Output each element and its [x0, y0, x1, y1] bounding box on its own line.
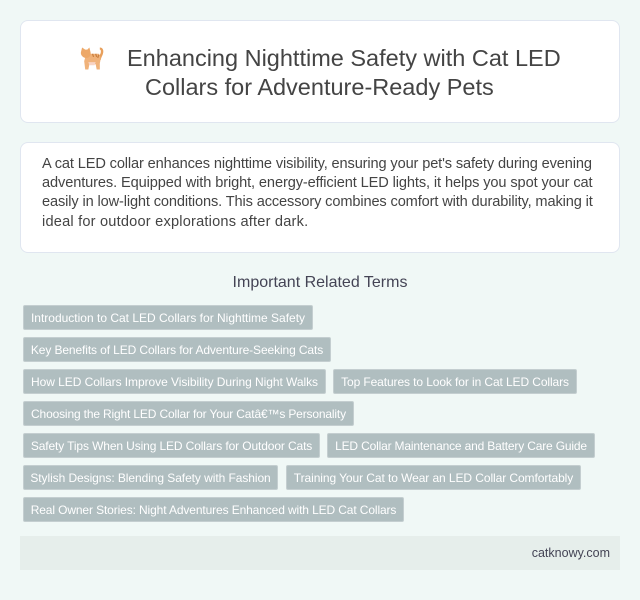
- tag: Introduction to Cat LED Collars for Nighttime Safety: [31, 311, 305, 325]
- tag: [23, 369, 326, 394]
- tag: [23, 465, 278, 490]
- title: Collars for Adventure-Ready Pets: [145, 74, 494, 100]
- description text: easily in low-light conditions. This accessory combines comfort with durability, making it: [42, 194, 593, 210]
- tag: [23, 497, 404, 522]
- description text: ideal for outdoor explorations after dark.: [42, 214, 308, 230]
- footer text: catknowy.com: [532, 546, 610, 560]
- tag: How LED Collars Improve Visibility During Night Walks: [31, 375, 318, 389]
- tag list: [23, 305, 595, 522]
- title: Enhancing Nighttime Safety with Cat LED: [127, 45, 561, 71]
- footer bar: [20, 536, 620, 570]
- panel: description: [20, 142, 620, 253]
- tag: [327, 433, 595, 458]
- tag: Choosing the Right LED Collar for Your Catâ€™s Personality: [31, 407, 346, 421]
- tag: Real Owner Stories: Night Adventures Enhanced with LED Cat Collars: [31, 503, 396, 517]
- description text: A cat LED collar enhances nighttime visibility, ensuring your pet's safety during evening: [42, 156, 592, 172]
- tag: [286, 465, 581, 490]
- description text: adventures. Equipped with bright, energy-efficient LED lights, it helps you spot your cat: [42, 175, 592, 191]
- tag: LED Collar Maintenance and Battery Care Guide: [335, 439, 587, 453]
- heading: related terms: Important Related Terms: [233, 274, 407, 291]
- tag: [23, 433, 320, 458]
- tag: Safety Tips When Using LED Collars for Outdoor Cats: [31, 439, 312, 453]
- tag: [23, 337, 331, 362]
- icon: cat: [80, 48, 104, 70]
- tag: [333, 369, 577, 394]
- description text: [42, 156, 593, 230]
- tag: Stylish Designs: Blending Safety with Fashion: [30, 471, 271, 485]
- tag: Top Features to Look for in Cat LED Collars: [341, 375, 569, 389]
- tag: Key Benefits of LED Collars for Adventure-Seeking Cats: [31, 343, 323, 357]
- tag: [23, 305, 313, 330]
- title: [127, 45, 561, 100]
- panel: title card: [20, 20, 620, 123]
- tag: Training Your Cat to Wear an LED Collar Comfortably: [294, 471, 573, 485]
- tag: [23, 401, 354, 426]
